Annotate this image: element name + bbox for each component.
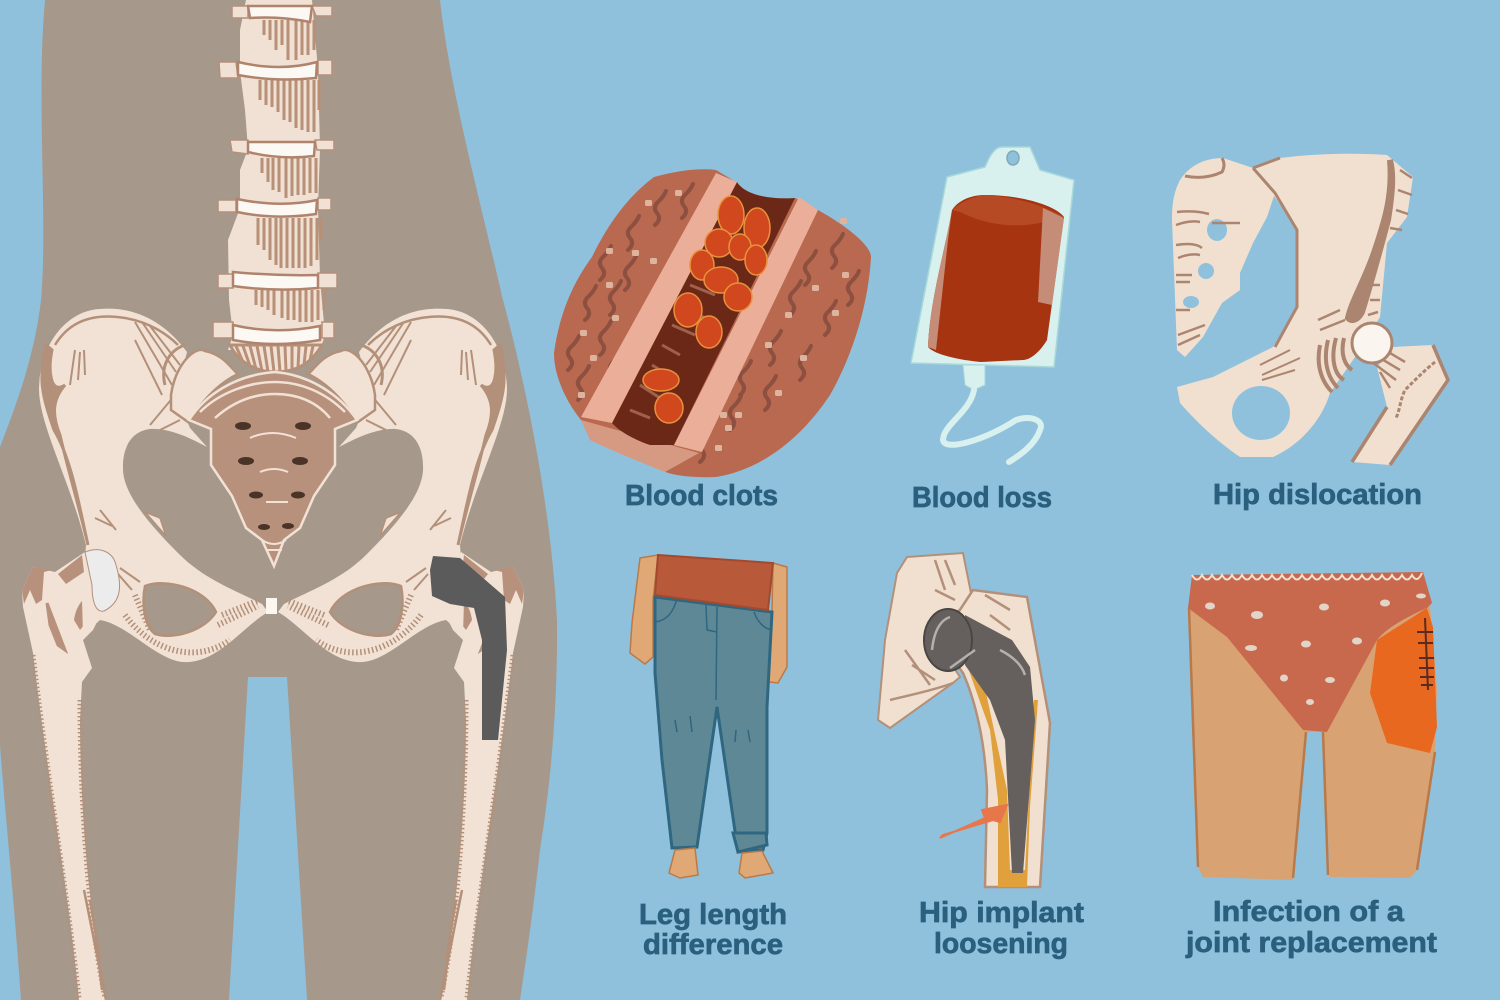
label: hip implant loosening: Hip implant <box>919 897 1084 929</box>
label: infection of a joint replacement <box>1185 896 1437 959</box>
label: hip dislocation: Hip dislocation <box>1213 479 1422 511</box>
icon: hip dislocation <box>1172 154 1448 465</box>
label: hip implant loosening <box>919 897 1084 960</box>
label: leg length difference <box>639 899 787 961</box>
label: leg length difference: difference <box>643 929 783 961</box>
icon: blood bag <box>911 147 1074 462</box>
body silhouette <box>0 0 557 1000</box>
label: blood loss: Blood loss <box>912 482 1052 514</box>
sacrum <box>189 372 357 566</box>
panel: body silhouette with skeleton <box>0 0 557 1000</box>
label: hip implant loosening: loosening <box>934 928 1068 960</box>
icon: hip implant loosening <box>878 553 1050 887</box>
label: blood clots: Blood clots <box>625 480 778 512</box>
arrow <box>940 805 1007 838</box>
label: infection of a joint replacement: joint replacement <box>1185 927 1437 959</box>
left half of pelvis and femur <box>22 309 268 1000</box>
right half of pelvis and femur (mirrored) <box>278 309 524 1000</box>
pubic symphysis <box>266 598 277 614</box>
icon: leg length difference <box>630 555 787 878</box>
label: infection of a joint replacement: Infection of a <box>1213 896 1405 928</box>
spine <box>213 0 337 372</box>
icon: joint infection <box>1188 572 1437 880</box>
icon: blood clot in vessel <box>554 169 871 477</box>
natural hip ball <box>85 550 120 611</box>
hip implant <box>430 556 507 740</box>
label: leg length difference: Leg length <box>639 899 787 931</box>
